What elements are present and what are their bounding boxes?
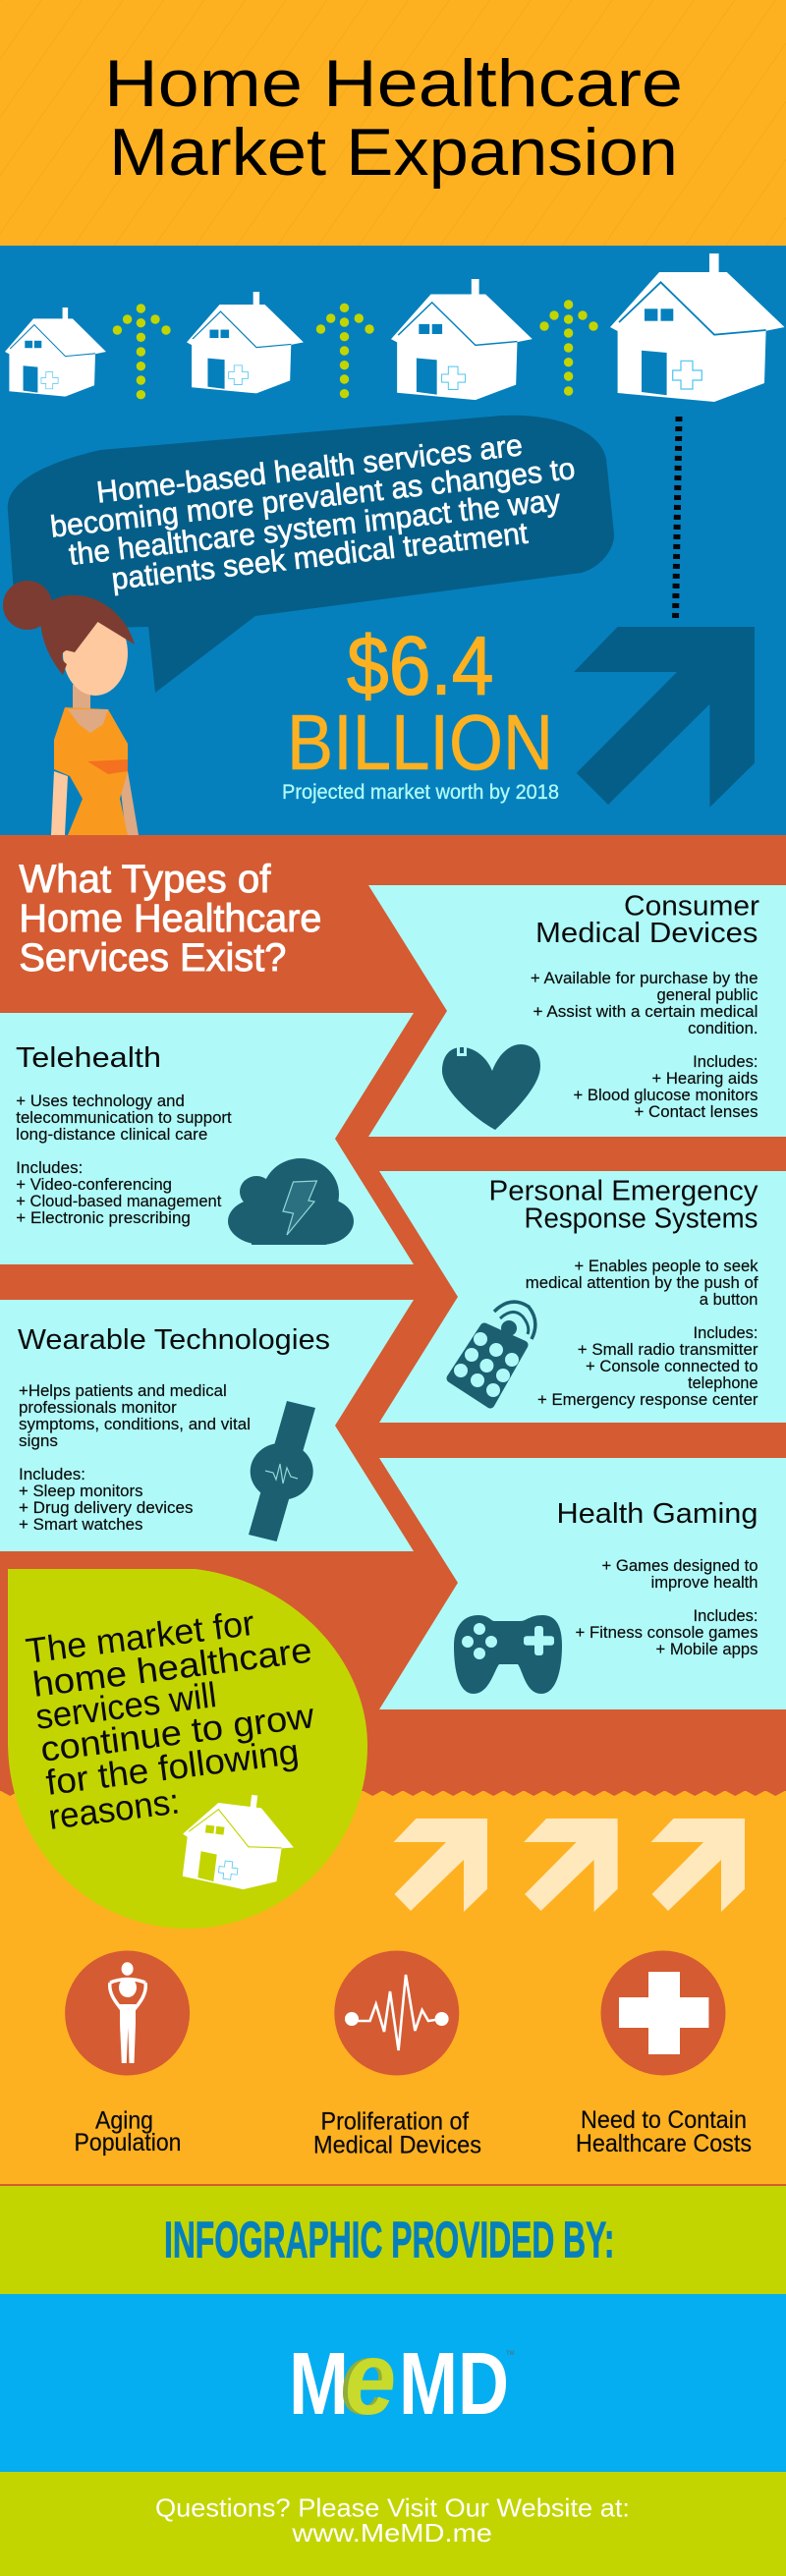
arrows: three light growth arrows <box>393 1819 745 1912</box>
panel: health gaming <box>379 1458 786 1709</box>
text: emergency response details: Includes: <box>694 1324 758 1342</box>
text: website call to action: www.MeMD.me <box>291 2518 492 2548</box>
footer band: logo <box>0 2294 786 2472</box>
blue market section <box>0 246 786 835</box>
callout: growth reasons blob <box>8 1569 367 1929</box>
heading: consumer medical devices: Consumer <box>624 891 759 923</box>
icon: smart watch <box>249 1401 315 1541</box>
callout text: The market for <box>24 1602 256 1671</box>
text: emergency response details: telephone <box>688 1374 758 1392</box>
text: consumer medical devices details: Includes: <box>693 1053 758 1071</box>
text: wearable details: + Smart watches <box>19 1516 143 1534</box>
reason: proliferation of medical devices <box>313 1951 481 2159</box>
text: wearable details: + Sleep monitors <box>19 1483 143 1500</box>
text: gaming details: + Mobile apps <box>656 1641 758 1658</box>
text: emergency response details: + Console connected to <box>586 1358 758 1375</box>
text: emergency response details: + Emergency response center <box>537 1391 758 1409</box>
header band <box>0 0 786 246</box>
panel: wearable technologies <box>0 1300 414 1551</box>
text: telehealth details: Includes: <box>16 1159 83 1177</box>
heading: wearable technologies: Wearable Technologies <box>18 1324 330 1356</box>
stat: $6.4 billion: BILLION <box>287 699 553 786</box>
logo: MeMD <box>289 2321 515 2436</box>
text: wearable details: professionals monitor <box>19 1399 177 1417</box>
heading: what types <box>19 858 321 980</box>
arrow: dotted up arrow 3 <box>539 300 598 396</box>
label: proliferation: Medical Devices <box>313 2132 481 2159</box>
title: Market Expansion <box>109 115 678 190</box>
callout text: continue to grow <box>38 1695 317 1769</box>
illustration: woman <box>3 581 139 835</box>
footer band: website <box>0 2472 786 2576</box>
heading: personal emergency response systems <box>489 1176 758 1234</box>
label: aging population <box>75 2107 181 2156</box>
stat: $6.4 billion: Projected market worth by 2018 <box>282 781 559 804</box>
speech bubble text: patients seek medical treatment <box>110 516 530 596</box>
text: telehealth details <box>16 1092 232 1227</box>
stat: $6.4 billion: $6.4 <box>347 620 493 712</box>
label: contain costs <box>576 2106 752 2157</box>
red services section background <box>0 835 786 1791</box>
text: wearable details: +Helps patients and medical <box>19 1382 227 1400</box>
text: emergency response details <box>526 1258 758 1409</box>
text: gaming details: + Games designed to <box>601 1557 758 1575</box>
heading: telehealth: Telehealth <box>16 1042 161 1074</box>
text: telehealth details: + Video-conferencing <box>16 1176 172 1194</box>
text: wearable details: signs <box>19 1432 58 1450</box>
title: Home Healthcare <box>104 46 683 121</box>
text: wearable details <box>19 1382 251 1534</box>
reason: aging population <box>65 1951 190 2156</box>
text: telehealth details: + Cloud-based management <box>16 1193 222 1210</box>
stat: $6.4 billion <box>282 620 559 804</box>
text: gaming details: improve health <box>650 1574 758 1592</box>
text: emergency response details: + Enables people to seek <box>574 1258 758 1275</box>
speech bubble <box>8 416 614 693</box>
icon: person carrying child <box>110 1962 145 2063</box>
text: consumer medical devices details: + Contact lenses <box>635 1103 758 1121</box>
arrow: dotted up arrow 1 <box>113 304 171 399</box>
callout text: home healthcare <box>30 1629 314 1705</box>
icon: cloud with lightning <box>228 1158 354 1245</box>
arrow: big growth arrow <box>574 627 755 808</box>
speech bubble text: becoming more prevalent as changes to <box>48 451 577 544</box>
icon: heartbeat line <box>345 1975 449 2050</box>
callout text: reasons: <box>46 1780 182 1837</box>
text: telehealth details: + Electronic prescribing <box>16 1209 191 1227</box>
text: wearable details: + Drug delivery devices <box>19 1499 193 1517</box>
callout text: services will <box>33 1674 219 1737</box>
text: consumer medical devices details <box>531 970 758 1121</box>
label: proliferation: Proliferation of <box>320 2108 469 2136</box>
icon: growing houses row <box>5 253 784 402</box>
text: emergency response details: + Small radio transmitter <box>578 1341 758 1359</box>
logo: MeMD: M <box>289 2335 349 2434</box>
heading: what types: Services Exist? <box>19 936 286 980</box>
label: proliferation <box>313 2108 481 2159</box>
text: website call to action <box>155 2493 630 2548</box>
dotted line to big arrow <box>676 417 679 619</box>
text: consumer medical devices details: condition. <box>688 1020 758 1037</box>
label: contain costs: Need to Contain <box>581 2106 747 2134</box>
callout text: for the following <box>43 1731 301 1803</box>
speech bubble text: the healthcare system impact the way <box>67 482 563 572</box>
speech bubble text <box>48 427 577 596</box>
logo: MeMD: TM <box>506 2351 515 2357</box>
panel: telehealth <box>0 1013 414 1264</box>
text: gaming details <box>576 1557 758 1658</box>
panel: personal emergency response systems <box>379 1171 786 1423</box>
text: website call to action: Questions? Please Visit Our Website at: <box>155 2493 630 2523</box>
icon: house in blob <box>177 1787 300 1895</box>
text: consumer medical devices details: + Hearing aids <box>652 1070 758 1088</box>
text: wearable details: Includes: <box>19 1466 85 1484</box>
text: consumer medical devices details: + Assist with a certain medical <box>533 1003 758 1021</box>
text: emergency response details: medical attention by the push of <box>526 1274 758 1292</box>
text: consumer medical devices details: + Blood glucose monitors <box>574 1087 758 1104</box>
panel: consumer medical devices <box>368 885 786 1137</box>
icon: medical cross <box>619 1972 708 2054</box>
heading: personal emergency response systems: Personal Emergency <box>489 1176 758 1207</box>
text: gaming details: + Fitness console games <box>576 1624 758 1642</box>
text: gaming details: Includes: <box>694 1607 758 1625</box>
icon: game controller <box>454 1615 562 1694</box>
orange reasons section background <box>0 1791 786 2184</box>
text: telehealth details: long-distance clinical care <box>16 1126 207 1144</box>
heading: personal emergency response systems: Response Systems <box>525 1203 758 1234</box>
text: emergency response details: a button <box>700 1291 758 1309</box>
label: aging population: Population <box>75 2129 181 2156</box>
logo: MeMD: e <box>345 2321 396 2436</box>
text: consumer medical devices details: + Available for purchase by the <box>531 970 758 987</box>
icon: heart <box>442 1044 540 1130</box>
text: wearable details: symptoms, conditions, and vital <box>19 1416 251 1433</box>
footer band: provided by <box>0 2184 786 2294</box>
logo: MeMD: MD <box>399 2335 509 2434</box>
heading: what types: What Types of <box>19 858 271 901</box>
callout text <box>24 1602 317 1837</box>
speech bubble text: Home-based health services are <box>94 427 525 510</box>
logo: MeMD: e <box>340 2321 393 2436</box>
label: contain costs: Healthcare Costs <box>576 2130 752 2157</box>
heading: consumer medical devices <box>535 891 759 949</box>
label: aging population: Aging <box>95 2107 153 2135</box>
heading: what types: Home Healthcare <box>19 897 321 940</box>
heading: consumer medical devices: Medical Devices <box>535 918 758 949</box>
text: consumer medical devices details: general public <box>656 986 758 1004</box>
arrow: dotted up arrow 2 <box>316 304 374 398</box>
icon: remote transmitter <box>451 1302 535 1404</box>
reason: need to contain healthcare costs <box>576 1951 752 2157</box>
text: telehealth details: telecommunication to support <box>16 1109 232 1127</box>
text: telehealth details: + Uses technology and <box>16 1092 185 1110</box>
heading: health gaming: Health Gaming <box>556 1498 758 1530</box>
title <box>104 46 683 190</box>
